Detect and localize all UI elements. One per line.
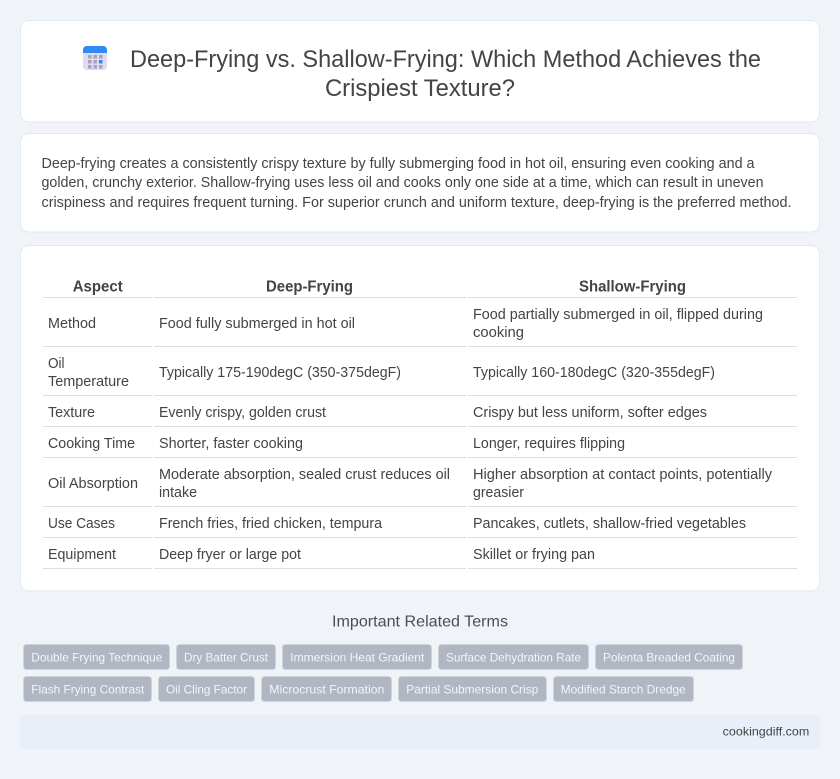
row: method: Food partially submerged in oil, flipped during	[473, 307, 763, 323]
row: method	[48, 307, 763, 341]
intro panel	[20, 134, 820, 232]
row: oil absorption: Higher absorption at contact points, potentially	[473, 467, 773, 483]
table header: Shallow-Frying	[579, 278, 686, 296]
comparison table panel	[20, 246, 820, 591]
tag: surface dehydration rate: Surface Dehydration Rate	[446, 650, 581, 664]
title: Deep-Frying vs. Shallow-Frying: Which Method Achieves the	[130, 46, 761, 73]
row: texture: Texture	[48, 405, 95, 421]
related terms heading: Important Related Terms	[332, 614, 508, 630]
row: equipment: Skillet or frying pan	[473, 547, 595, 563]
tag: flash frying contrast: Flash Frying Contrast	[31, 682, 145, 696]
row: use cases: French fries, fried chicken, tempura	[159, 516, 382, 532]
row: oil temperature: Typically 175-190degC (350-375degF)	[159, 365, 401, 381]
tag: double frying technique: Double Frying Technique	[31, 650, 163, 664]
tag: polenta breaded coating	[596, 644, 742, 670]
row: method: Food fully submerged in hot oil	[159, 316, 355, 332]
intro text: Deep-frying creates a consistently crispy texture by fully submerging food in hot oil, ensuring even cooking and a	[42, 156, 754, 172]
title: Crispiest Texture?	[325, 75, 515, 102]
row: oil temperature: Temperature	[48, 374, 129, 390]
table header: Aspect	[73, 278, 123, 296]
row: oil temperature: Typically 160-180degC (320-355degF)	[473, 365, 715, 381]
tag: immersion heat gradient: Immersion Heat Gradient	[290, 650, 425, 664]
tag: dry batter crust	[176, 644, 276, 670]
title	[130, 46, 761, 102]
tag: microcrust formation: Microcrust Formation	[269, 682, 384, 696]
row: method: Method	[48, 316, 96, 332]
row: use cases: Use Cases	[48, 516, 115, 532]
tag: partial submersion crisp: Partial Submersion Crisp	[406, 682, 539, 696]
intro text	[42, 156, 792, 211]
row: texture	[48, 405, 707, 421]
row: cooking time: Longer, requires flipping	[473, 436, 625, 452]
header panel	[20, 20, 820, 122]
tag: microcrust formation	[262, 676, 392, 702]
tag: modified starch dredge	[554, 676, 694, 702]
tag: surface dehydration rate	[438, 644, 588, 670]
row: oil absorption: Oil Absorption	[48, 476, 138, 492]
related terms tags	[24, 644, 742, 702]
table header: Deep-Frying	[266, 278, 353, 296]
row: method: cooking	[473, 325, 524, 341]
footer bar	[20, 715, 820, 749]
tag: dry batter crust: Dry Batter Crust	[184, 650, 269, 664]
row: use cases	[48, 516, 746, 532]
row: oil temperature: Oil	[48, 356, 64, 372]
row: texture: Crispy but less uniform, softer edges	[473, 405, 707, 421]
footer site name: cookingdiff.com	[723, 724, 809, 738]
row: oil temperature	[48, 356, 715, 390]
row: cooking time	[48, 436, 625, 452]
tag: partial submersion crisp	[398, 676, 546, 702]
tag: polenta breaded coating: Polenta Breaded Coating	[603, 650, 735, 664]
row: cooking time: Shorter, faster cooking	[159, 436, 303, 452]
row: use cases: Pancakes, cutlets, shallow-fried vegetables	[473, 516, 746, 532]
tag: modified starch dredge: Modified Starch Dredge	[561, 682, 686, 696]
row: oil absorption: greasier	[473, 485, 524, 501]
tag: oil cling factor	[158, 676, 254, 702]
tag: oil cling factor: Oil Cling Factor	[166, 682, 247, 696]
row: oil absorption	[48, 467, 773, 501]
icon: calendar	[83, 46, 107, 70]
intro text: golden, crunchy exterior. Shallow-frying uses less oil and cooks only one side at a time, which can result in uneven	[42, 175, 764, 191]
tag: double frying technique	[24, 644, 170, 670]
row: equipment: Deep fryer or large pot	[159, 547, 301, 563]
tag: flash frying contrast	[24, 676, 152, 702]
row: equipment: Equipment	[48, 547, 116, 563]
row: texture: Evenly crispy, golden crust	[159, 405, 326, 421]
row: oil absorption: intake	[159, 485, 197, 501]
tag: immersion heat gradient	[282, 644, 432, 670]
row: equipment	[48, 547, 595, 563]
row: cooking time: Cooking Time	[48, 436, 135, 452]
table header	[73, 278, 686, 296]
row: oil absorption: Moderate absorption, sealed crust reduces oil	[159, 467, 450, 483]
intro text: crispiness and requires frequent turning. For superior crunch and uniform texture, deep-frying is the preferred method.	[42, 195, 792, 211]
